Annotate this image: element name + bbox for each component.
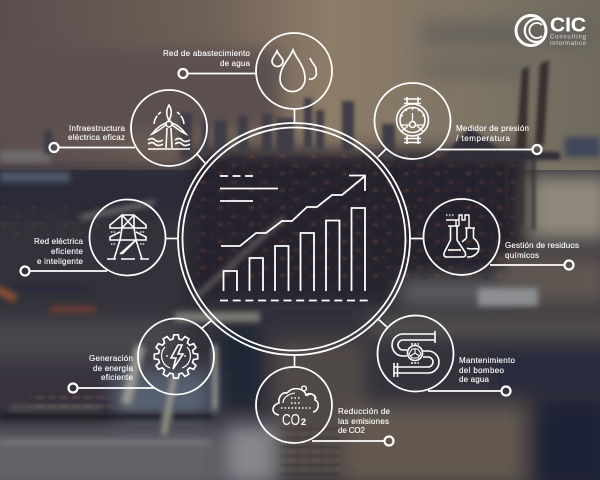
icon text: CO2: 2 xyxy=(301,417,306,427)
icon: pipes and valve xyxy=(392,331,439,377)
node: water pumping maintenance: Mantenimiento xyxy=(459,356,516,365)
trend arrow xyxy=(221,176,365,246)
node: efficient energy generation: eficiente xyxy=(101,373,134,382)
node: water pumping maintenance: del bombeo xyxy=(459,366,505,375)
city speck texture xyxy=(0,155,515,475)
icon: gauge xyxy=(396,97,428,144)
node: smart grid: eficiente xyxy=(51,247,84,256)
icon: gear with lightning bolt xyxy=(154,335,198,378)
node: water supply xyxy=(163,33,332,109)
heading dashes and lines xyxy=(220,176,278,201)
node: smart grid: e inteligente xyxy=(37,257,84,266)
skyline and cranes xyxy=(44,60,560,230)
node: pressure gauge xyxy=(374,83,542,159)
logo: CIC Consulting Informático xyxy=(516,14,587,47)
node: wind infrastructure: eléctrica eficaz xyxy=(68,133,125,142)
node: smart grid: Red eléctrica xyxy=(34,237,84,246)
node: pressure gauge: / temperatura xyxy=(456,134,511,143)
node: efficient energy generation: de energía xyxy=(93,364,134,373)
node: water pumping maintenance: de agua xyxy=(459,375,490,384)
node: CO2 reduction xyxy=(256,367,394,446)
node: efficient energy generation: Generación xyxy=(89,354,133,363)
node: chemical waste: Gestión de residuos xyxy=(505,241,579,250)
icon: electricity pylon xyxy=(107,215,149,259)
icon text: CO2: CO xyxy=(282,412,300,429)
node: chemical waste: químicos xyxy=(505,251,539,260)
node: water supply: de agua xyxy=(220,59,251,68)
central hub: growth chart xyxy=(178,123,410,355)
node: chemical waste xyxy=(424,199,579,275)
node: CO2 reduction: las emisiones xyxy=(338,417,389,426)
logo: CIC Consulting Informático: Informático xyxy=(550,41,587,47)
node: pressure gauge: Medidor de presión xyxy=(456,124,529,133)
node: efficient energy generation xyxy=(68,318,214,394)
node: CO2 reduction: de CO2 xyxy=(338,426,366,435)
logo: CIC Consulting Informático: CIC xyxy=(550,14,586,36)
node: water pumping maintenance xyxy=(378,316,516,396)
icon: CO2 cloud xyxy=(273,386,318,415)
icon: wind turbine xyxy=(148,105,190,149)
node: wind infrastructure xyxy=(50,90,207,166)
logo: CIC Consulting Informático: Consulting xyxy=(550,34,586,40)
connectors from hub to satellite circles xyxy=(166,109,423,367)
node: CO2 reduction: Reducción de xyxy=(338,407,391,416)
node: smart grid xyxy=(20,200,166,276)
dashed baseline xyxy=(220,300,368,302)
icon: flasks xyxy=(444,215,479,257)
node: water supply: Red de abastecimiento xyxy=(163,49,251,58)
node: wind infrastructure: Infraestructura xyxy=(69,124,126,133)
bars xyxy=(224,208,365,291)
icon: water drops xyxy=(272,50,316,92)
